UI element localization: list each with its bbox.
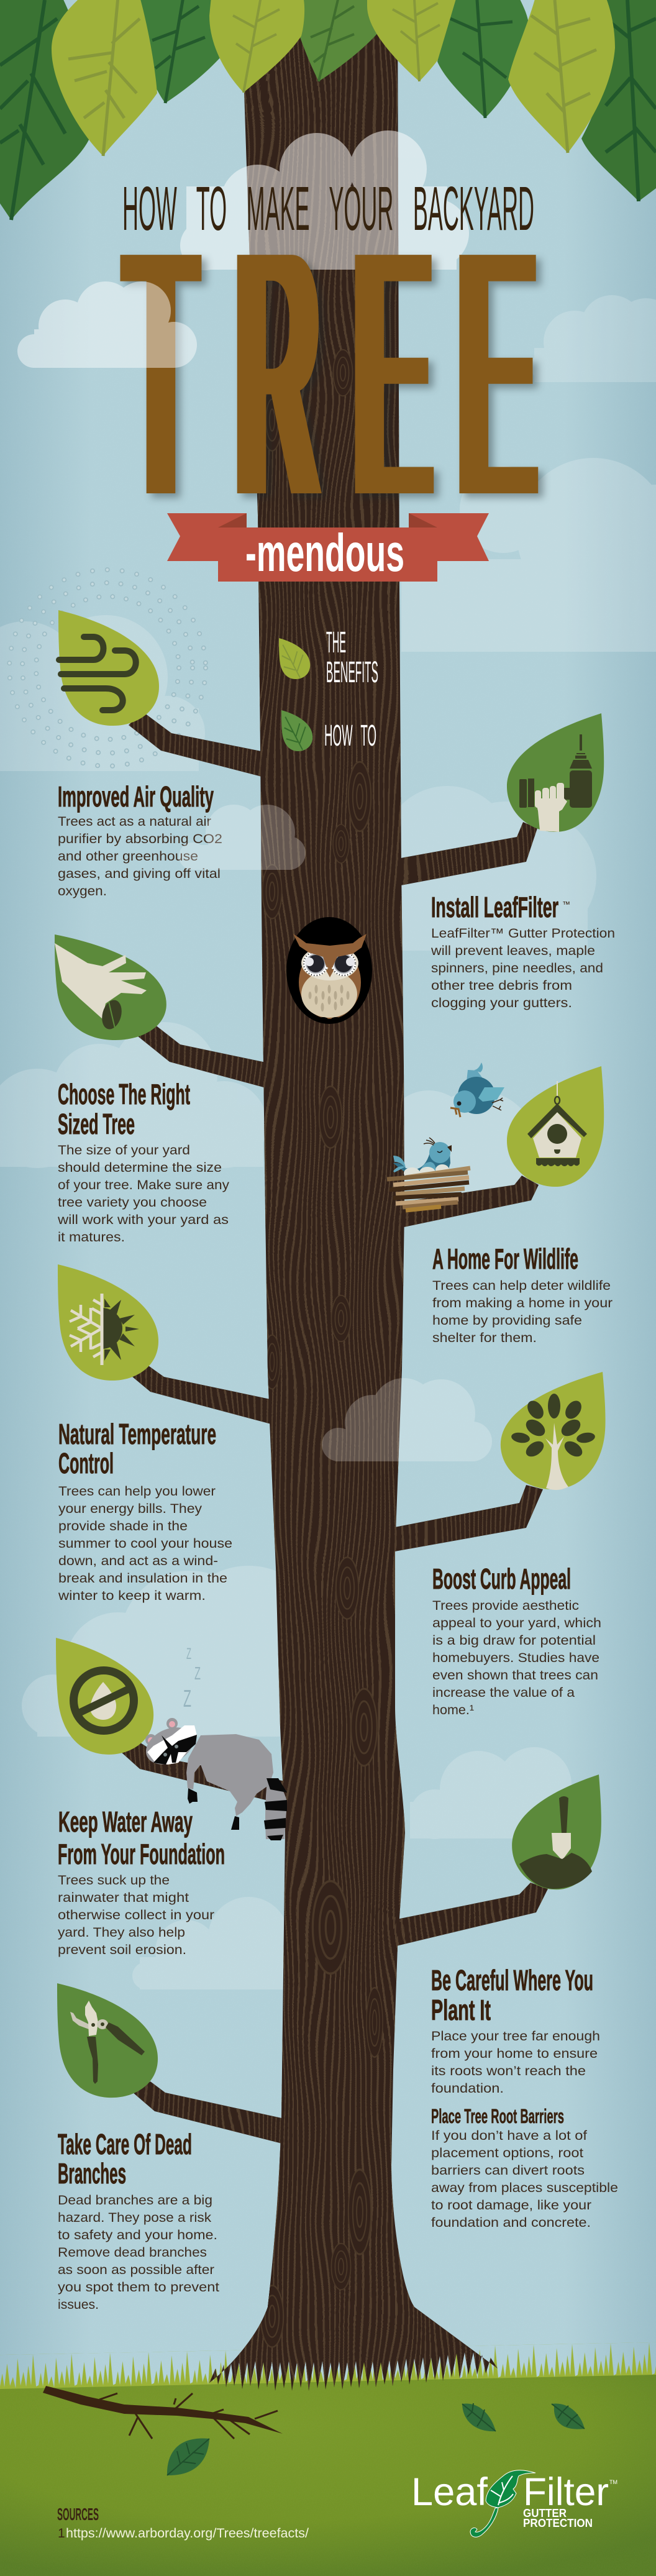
panel: be careful where you plant it: foundation and concrete. bbox=[431, 2216, 591, 2230]
panel: keep water away: Keep Water Away bbox=[58, 1806, 193, 1838]
panel: take care of dead branches: Branches bbox=[58, 2157, 126, 2190]
panel: install leaffilter: other tree debris from bbox=[431, 979, 572, 993]
panel: choose the right sized tree: should determine the size bbox=[58, 1161, 222, 1175]
icon: drill leaf bbox=[507, 713, 604, 832]
legend on trunk bbox=[279, 626, 378, 752]
canopy leaf dark green 2 bbox=[137, 0, 222, 103]
panel: take care of dead branches: issues. bbox=[58, 2298, 99, 2312]
text: HOW TO bbox=[324, 719, 376, 752]
cloud: behind title over trunk bbox=[180, 130, 469, 270]
panel: be careful where you plant it: If you don’t have a lot of bbox=[431, 2129, 587, 2143]
icon: no water leaf bbox=[56, 1638, 153, 1755]
sources bbox=[57, 2505, 309, 2541]
panel: choose the right sized tree: The size of your yard bbox=[58, 1143, 190, 1158]
panel: install leaffilter: clogging your gutters. bbox=[431, 996, 572, 1010]
panel: improved air quality: purifier by absorbing CO2 bbox=[58, 832, 222, 846]
snoring z letters: Z bbox=[186, 1645, 191, 1663]
panel: install leaffilter: will prevent leaves, maple bbox=[430, 944, 595, 958]
bird: on nest bbox=[393, 1138, 452, 1179]
bird nest bbox=[387, 1168, 470, 1210]
canopy leaf far right bbox=[581, 0, 656, 201]
cloud: over trunk mid right bbox=[322, 1378, 492, 1461]
logo: leaffilter: Leaf bbox=[411, 2470, 488, 2514]
snoring z letters: Z bbox=[194, 1664, 201, 1684]
ribbon banner bbox=[167, 513, 489, 583]
panel: improved air quality: gases, and giving off vital bbox=[58, 867, 221, 881]
icon: wind leaf bbox=[58, 610, 159, 726]
panel: natural temperature control: your energy bills. They bbox=[58, 1502, 203, 1516]
ground bbox=[0, 2375, 656, 2576]
panel: install leaffilter: spinners, pine needles, and bbox=[431, 961, 603, 975]
canopy leaf lime 4 bbox=[508, 0, 615, 153]
fallen leaf right bbox=[552, 2403, 585, 2429]
panel: take care of dead branches: as soon as possible after bbox=[58, 2263, 214, 2277]
panel: improved air quality: Trees act as a natural air bbox=[58, 815, 211, 829]
bird: flying bbox=[450, 1062, 504, 1117]
logo: leaffilter: TM bbox=[609, 2479, 617, 2485]
panel: improved air quality: Improved Air Quality bbox=[58, 780, 214, 813]
logo: leaffilter bbox=[411, 2470, 617, 2537]
ribbon banner: -mendous bbox=[245, 524, 404, 583]
panel: natural temperature control: Trees can help you lower bbox=[58, 1484, 216, 1499]
sources: https://www.arborday.org/Trees/treefacts/ bbox=[66, 2526, 309, 2541]
panel: choose the right sized tree: it matures. bbox=[58, 1230, 125, 1245]
cloud: large right under title bbox=[401, 458, 656, 652]
panel: be careful where you plant it: to root damage, like your bbox=[431, 2198, 591, 2213]
cloud: left behind Choose the right sized tree bbox=[0, 1022, 267, 1168]
panel: natural temperature control: Natural Temperature bbox=[58, 1418, 216, 1450]
panel: boost curb appeal: Trees provide aesthetic bbox=[432, 1599, 579, 1613]
cloud: right behind Install LeafFilter bbox=[382, 786, 596, 951]
owl in tree hollow bbox=[286, 917, 372, 1024]
panel: choose the right sized tree: tree variety you choose bbox=[58, 1195, 207, 1210]
dot rings around air quality leaf bbox=[9, 570, 206, 766]
panel: choose the right sized tree: Choose The Right bbox=[58, 1078, 190, 1110]
top canopy leaves bbox=[0, 0, 656, 220]
panel: install leaffilter: Install LeafFilter bbox=[431, 891, 558, 923]
icon: shovel leaf bbox=[512, 1774, 601, 1889]
panel: boost curb appeal bbox=[432, 1372, 606, 1717]
raccoon bbox=[140, 1718, 287, 1840]
panel: boost curb appeal: homebuyers. Studies have bbox=[432, 1651, 599, 1665]
panel: choose the right sized tree: Sized Tree bbox=[58, 1108, 135, 1140]
panel: boost curb appeal: increase the value of a bbox=[432, 1686, 575, 1700]
icon: birdhouse leaf bbox=[507, 1066, 604, 1187]
icon: hand leaf bbox=[55, 934, 166, 1040]
panel: take care of dead branches: to safety and your home. bbox=[58, 2228, 217, 2242]
panel: take care of dead branches: you spot them to prevent bbox=[58, 2280, 219, 2295]
canopy leaf lime 3 bbox=[367, 0, 461, 81]
panel: install leaffilter: ™ bbox=[562, 900, 570, 909]
panel: be careful where you plant it: from your home to ensure bbox=[431, 2047, 598, 2061]
legend on trunk: THE bbox=[326, 626, 346, 659]
canopy leaf lime 1 bbox=[52, 0, 157, 156]
tree trunk and branches bbox=[122, 34, 548, 2391]
sources: 1 bbox=[58, 2526, 65, 2541]
panel: natural temperature control: Control bbox=[58, 1447, 114, 1479]
cloud: left behind air quality leaf bbox=[0, 615, 205, 771]
panel: natural temperature control: winter to keep it warm. bbox=[58, 1589, 206, 1603]
cloud: top right behind title bbox=[531, 295, 656, 382]
panel: choose the right sized tree: will work with your yard as bbox=[57, 1213, 229, 1227]
panel: boost curb appeal: home.¹ bbox=[432, 1703, 474, 1717]
panel: keep water away: otherwise collect in your bbox=[58, 1908, 214, 1922]
cloud: behind birds bbox=[385, 1090, 537, 1208]
panel: be careful where you plant it: away from places susceptible bbox=[431, 2181, 618, 2195]
cloud: lower left behind foundation text bbox=[132, 1897, 299, 1989]
panel: improved air quality: oxygen. bbox=[58, 884, 107, 898]
panel: improved air quality: and other greenhouse bbox=[58, 849, 198, 864]
panel: keep water away: From Your Foundation bbox=[58, 1838, 225, 1870]
cloud: over trunk near air quality text bbox=[179, 805, 306, 870]
panel: keep water away: Trees suck up the bbox=[58, 1873, 170, 1888]
panel: improved air quality bbox=[58, 610, 222, 898]
panel: be careful where you plant it: Place Tree Root Barriers bbox=[431, 2105, 564, 2127]
panel: natural temperature control: break and insulation in the bbox=[58, 1571, 227, 1586]
panel: be careful where you plant it bbox=[431, 1774, 618, 2230]
grass blades bbox=[0, 2342, 656, 2400]
panel: choose the right sized tree bbox=[55, 934, 230, 1245]
panel: a home for wildlife: shelter for them. bbox=[432, 1331, 537, 1345]
icon: tree leaf bbox=[501, 1372, 606, 1490]
cloud: right behind shovel leaf bbox=[410, 1747, 575, 1839]
canopy leaf lime 2 bbox=[209, 0, 304, 93]
panel: be careful where you plant it: placement options, root bbox=[431, 2146, 583, 2160]
canopy leaf dark green 3 bbox=[437, 0, 529, 118]
logo: leaffilter: Filter bbox=[523, 2470, 609, 2514]
panel: natural temperature control: provide shade in the bbox=[58, 1519, 188, 1533]
text: BENEFITS bbox=[326, 656, 378, 689]
panel: be careful where you plant it: Plant It bbox=[431, 1994, 491, 2026]
panel: take care of dead branches: Take Care Of Dead bbox=[58, 2128, 192, 2160]
panel: keep water away: yard. They also help bbox=[58, 1925, 185, 1940]
panel: boost curb appeal: even shown that trees can bbox=[432, 1668, 598, 1683]
logo: leaffilter: PROTECTION bbox=[523, 2517, 593, 2529]
snoring z letters bbox=[183, 1645, 201, 1712]
panel: take care of dead branches: Dead branches are a big bbox=[58, 2193, 212, 2208]
panel: a home for wildlife: from making a home in your bbox=[432, 1296, 613, 1310]
panel: be careful where you plant it: foundation. bbox=[431, 2081, 504, 2096]
panel: keep water away: rainwater that might bbox=[58, 1891, 189, 1905]
panel: boost curb appeal: is a big draw for potential bbox=[432, 1633, 596, 1648]
panel: be careful where you plant it: barriers can divert roots bbox=[431, 2163, 585, 2178]
legend leaf green bbox=[281, 710, 312, 751]
panel: keep water away: prevent soil erosion. bbox=[58, 1943, 186, 1957]
panel: choose the right sized tree: of your tree. Make sure any bbox=[58, 1178, 230, 1192]
fallen branch on grass bbox=[43, 2386, 283, 2439]
panel: boost curb appeal: appeal to your yard, which bbox=[432, 1616, 601, 1630]
logo: leaffilter: GUTTER bbox=[523, 2507, 567, 2519]
title: TREE: TREE bbox=[127, 180, 534, 567]
cloud: over letter T bbox=[17, 281, 197, 368]
panel: be careful where you plant it: Place your tree far enough bbox=[431, 2029, 600, 2044]
panel: natural temperature control: down, and act as a wind- bbox=[58, 1554, 218, 1568]
snoring z letters: Z bbox=[183, 1686, 191, 1712]
sources: SOURCES bbox=[57, 2505, 99, 2524]
panel: keep water away bbox=[56, 1638, 287, 1957]
icon: sun and snow leaf bbox=[58, 1264, 158, 1381]
cloud: lower left behind raccoon bbox=[22, 1566, 323, 1737]
panel: take care of dead branches: Remove dead branches bbox=[58, 2245, 207, 2260]
panel: natural temperature control: summer to cool your house bbox=[58, 1537, 232, 1551]
panel: a home for wildlife bbox=[387, 1062, 613, 1345]
canopy leaf far left bbox=[0, 0, 96, 220]
panel: take care of dead branches: hazard. They pose a risk bbox=[58, 2211, 212, 2225]
icon: pruners leaf bbox=[57, 1983, 158, 2098]
panel: a home for wildlife: Trees can help deter wildlife bbox=[432, 1279, 611, 1293]
legend leaf lime bbox=[279, 638, 310, 679]
canopy leaf centre translucent bbox=[299, 0, 379, 81]
fallen leaf middle bbox=[462, 2403, 496, 2431]
fallen leaf left bbox=[167, 2438, 209, 2475]
panel: natural temperature control bbox=[58, 1264, 232, 1603]
panel: a home for wildlife: home by providing safe bbox=[432, 1313, 582, 1328]
panel: be careful where you plant it: its roots won’t reach the bbox=[431, 2064, 586, 2078]
panel: install leaffilter: LeafFilter™ Gutter Protection bbox=[431, 926, 615, 941]
panel: install leaffilter bbox=[430, 713, 615, 1010]
panel: take care of dead branches bbox=[57, 1983, 219, 2312]
